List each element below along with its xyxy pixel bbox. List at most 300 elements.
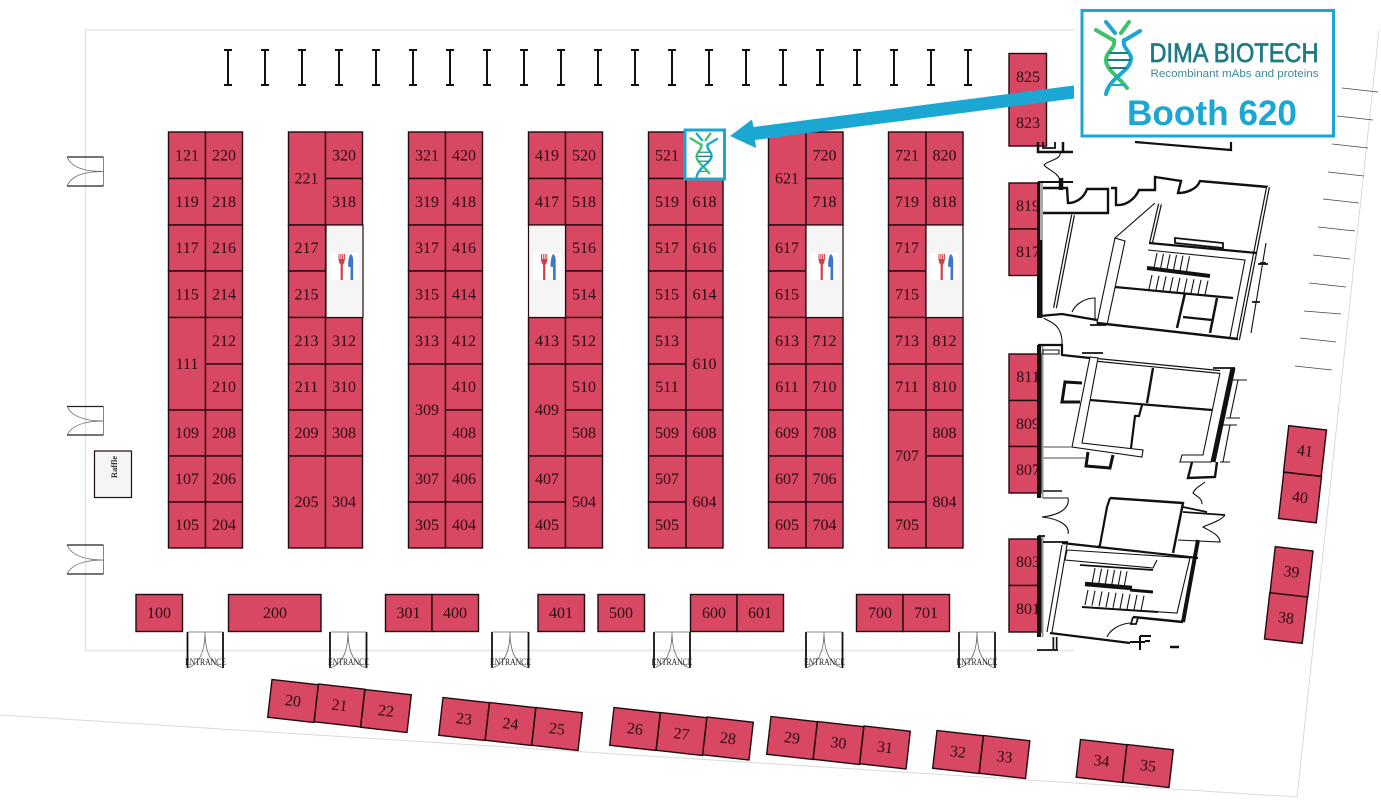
booth 24: [485, 702, 536, 746]
booth 417: 417: [535, 194, 559, 211]
entrance 3: [490, 632, 531, 668]
booth 21: 21: [331, 697, 348, 715]
booth 705: 705: [895, 517, 919, 534]
icon: small DNA logo: [691, 134, 717, 177]
booth 218: 218: [212, 194, 236, 211]
booth 809: 809: [1016, 416, 1040, 433]
booth 718: 718: [812, 194, 836, 211]
booth 706: 706: [812, 471, 836, 488]
booth 715: 715: [895, 286, 919, 304]
entrance 5: [804, 632, 845, 668]
booth 27: [656, 712, 707, 756]
booth 713: 713: [895, 333, 919, 350]
entrance 3: ENTRANCE: [490, 658, 531, 668]
booth 205: 205: [294, 494, 318, 511]
booth 608: [686, 410, 723, 456]
raffle box: Raffle: [109, 456, 119, 478]
booth 420: [446, 132, 482, 178]
booth 24: 24: [502, 715, 519, 734]
booth 610: 610: [692, 356, 716, 373]
brand name: DIMA BIOTECH: [1150, 38, 1318, 68]
entrance 4: ENTRANCE: [652, 658, 693, 668]
booth 719: [888, 178, 926, 225]
booth 600: [690, 594, 737, 632]
tagline: Recombinant mAbs and proteins: [1150, 68, 1319, 80]
booth 504: [566, 456, 602, 548]
top wall columns: [224, 50, 972, 85]
booth 304: [326, 456, 362, 548]
booth 34: [1076, 739, 1127, 783]
booth 819: [1009, 183, 1041, 229]
booth 216: [206, 225, 242, 271]
booth 418: 418: [452, 194, 476, 211]
booth 507: 507: [655, 471, 679, 488]
booth 513: 513: [655, 333, 679, 350]
booth 804: 804: [932, 494, 956, 511]
booth 514: [566, 271, 602, 318]
booth 208: [206, 410, 242, 456]
booth 215: [288, 271, 326, 318]
booth 107: [168, 456, 206, 502]
booth 410: [446, 364, 482, 410]
booth 109: [168, 410, 206, 456]
booth 404: 404: [452, 517, 476, 534]
icon: DNA logo: [1096, 22, 1140, 94]
booth 30: [813, 721, 864, 765]
booth 510: [566, 364, 602, 410]
booth 209: [288, 410, 326, 456]
booth 408: 408: [452, 425, 476, 442]
booth 801: [1009, 586, 1041, 632]
booth 312: [326, 318, 362, 364]
side door 2: [67, 406, 104, 435]
booth 22: 22: [377, 702, 395, 721]
booth column F: [768, 132, 843, 548]
booth 804: [926, 456, 963, 548]
booth 39: 39: [1283, 563, 1300, 582]
booth 509: [648, 410, 686, 456]
booth 309: [408, 364, 446, 456]
booth 601: [737, 594, 784, 632]
booth 317: [408, 225, 446, 271]
booth 701: [903, 594, 950, 632]
booth 35: [1123, 744, 1173, 788]
booth 613: [768, 318, 806, 364]
booth 720: [806, 132, 843, 178]
booth 508: [566, 410, 602, 456]
booth 416: [446, 225, 482, 271]
booth 801: 801: [1016, 601, 1040, 618]
booth 212: [206, 318, 242, 364]
booth 705: [888, 502, 926, 548]
booth column E: [648, 132, 723, 548]
booth 29: 29: [783, 729, 801, 748]
booth 26: 26: [626, 720, 644, 739]
booth 510: 510: [572, 379, 596, 396]
booth 808: 808: [932, 425, 956, 442]
booth 413: 413: [535, 333, 559, 350]
booth 216: 216: [212, 240, 236, 257]
booth 721: [888, 132, 926, 178]
booth 117: [168, 225, 206, 271]
booth 611: 611: [775, 379, 799, 396]
booth 618: [686, 178, 723, 225]
booth 310: [326, 364, 362, 410]
booth 318: 318: [332, 194, 356, 211]
booth 512: 512: [572, 333, 596, 350]
booth 204: [206, 502, 242, 548]
booth 319: 319: [415, 194, 439, 211]
booth 212: 212: [212, 333, 236, 350]
booth 307: 307: [415, 471, 439, 488]
booth 220: 220: [212, 148, 236, 164]
booth 607: [768, 456, 806, 502]
booth 509: 509: [655, 425, 679, 442]
booth 410: 410: [452, 379, 476, 396]
booth 38: [1264, 593, 1308, 643]
booth 613: 613: [775, 333, 799, 350]
booth 315: 315: [415, 286, 439, 304]
booth 803: 803: [1016, 554, 1040, 571]
entrance 1: ENTRANCE: [185, 658, 226, 668]
booth 601: 601: [748, 605, 772, 622]
booth 409: [528, 364, 566, 456]
booth 39: [1270, 547, 1313, 597]
booth 825: [1009, 54, 1046, 100]
booth 304: 304: [332, 494, 356, 511]
booth 817: [1009, 229, 1041, 276]
booth 401: 401: [549, 605, 573, 622]
booth 823: 823: [1016, 115, 1040, 132]
booth 820: [926, 132, 963, 178]
booth 515: 515: [655, 286, 679, 304]
booth 419: [528, 132, 566, 178]
booth 508: 508: [572, 425, 596, 442]
booth 618: 618: [692, 194, 716, 211]
booth 704: [806, 502, 843, 548]
booth 710: 710: [812, 379, 836, 396]
booth 621: [768, 132, 806, 225]
booth 41: [1283, 426, 1327, 476]
booth 721: 721: [895, 148, 919, 164]
booth 405: 405: [535, 517, 559, 534]
booth 611: [768, 364, 806, 410]
booth 206: 206: [212, 471, 236, 488]
booth 711: [888, 364, 926, 410]
booth 810: [926, 364, 963, 410]
booth 518: [566, 178, 602, 225]
right wall booths: [1009, 54, 1046, 632]
booth 707: [888, 410, 926, 502]
booth 521: [648, 132, 686, 178]
booth 518: 518: [572, 194, 596, 211]
booth 516: 516: [572, 240, 596, 257]
booth 208: 208: [212, 425, 236, 442]
booth column G: [888, 132, 963, 548]
booth 309: 309: [415, 402, 439, 419]
arrow to booth 620: [730, 86, 1074, 148]
booth 818: 818: [932, 194, 956, 211]
booth 318: [326, 178, 362, 225]
booth 811: [1009, 354, 1041, 400]
booth 33: 33: [996, 748, 1013, 767]
booth 712: 712: [812, 333, 836, 350]
booth 305: 305: [415, 517, 439, 534]
booth 117: 117: [175, 240, 199, 257]
booth 221: [288, 132, 326, 225]
booth 404: [446, 502, 482, 548]
booth 610: [686, 318, 723, 410]
booth 414: [446, 271, 482, 318]
booth 313: 313: [415, 333, 439, 350]
booth 615: [768, 271, 806, 318]
booth 820: 820: [932, 148, 956, 164]
booth 109: 109: [175, 425, 199, 442]
booth 215: 215: [294, 286, 318, 304]
booth 621: 621: [775, 170, 799, 188]
entrance 2: ENTRANCE: [328, 658, 369, 668]
booth 30: 30: [830, 734, 847, 753]
booth 308: 308: [332, 425, 356, 442]
booth 500: [598, 594, 644, 632]
booth 708: 708: [812, 425, 836, 442]
booth 121: 121: [175, 148, 199, 164]
booth 517: 517: [655, 240, 679, 257]
booth 809: [1009, 400, 1041, 446]
booth 315: [408, 271, 446, 318]
tilted bottom booths: [268, 679, 1173, 788]
booth 608: 608: [692, 425, 716, 442]
booth 38: 38: [1277, 609, 1295, 628]
booth 409: 409: [535, 402, 559, 419]
booth 416: 416: [452, 240, 476, 257]
booth 811: 811: [1016, 369, 1040, 386]
booth 609: [768, 410, 806, 456]
booth 414: 414: [452, 286, 476, 304]
booth 35: 35: [1139, 757, 1157, 776]
booth 210: 210: [212, 379, 236, 396]
booth 609: 609: [775, 425, 799, 442]
booth 615: 615: [775, 286, 799, 304]
booth 23: 23: [455, 710, 473, 729]
booth column C: [408, 132, 482, 548]
booth 400: 400: [443, 605, 467, 622]
booth 405: [528, 502, 566, 548]
booth 519: 519: [655, 194, 679, 211]
booth 200: 200: [263, 605, 287, 622]
booth 712: [806, 318, 843, 364]
booth 700: 700: [868, 605, 892, 622]
booth 700: [856, 594, 903, 632]
booth 22: [361, 689, 411, 733]
booth 711: 711: [895, 379, 919, 396]
booth 25: 25: [548, 720, 566, 739]
booth 807: 807: [1016, 462, 1040, 479]
booth 520: 520: [572, 148, 596, 164]
booth 614: [686, 271, 723, 318]
booth 605: 605: [775, 517, 799, 534]
booth 616: [686, 225, 723, 271]
booth 823: [1009, 100, 1046, 146]
booth 500: 500: [609, 605, 633, 622]
booth 812: [926, 318, 963, 364]
booth 713: [888, 318, 926, 364]
booth 204: 204: [212, 517, 236, 534]
booth 210: [206, 364, 242, 410]
booth 715: [888, 271, 926, 318]
booth 507: [648, 456, 686, 502]
booth 605: [768, 502, 806, 548]
booth 321: 321: [415, 148, 439, 164]
booth 213: [288, 318, 326, 364]
booth 28: 28: [719, 730, 737, 748]
booth 407: 407: [535, 471, 559, 488]
booth 319: [408, 178, 446, 225]
booth 307: [408, 456, 446, 502]
side door 1: [67, 157, 104, 186]
entrance 4: [652, 632, 693, 668]
cafe area F: [806, 225, 843, 318]
booth 516: [566, 225, 602, 271]
booth 115: 115: [175, 286, 199, 304]
building floor plan upper: [1038, 142, 1268, 340]
booth 413: [528, 318, 566, 364]
booth 320: 320: [332, 148, 356, 164]
booth 515: [648, 271, 686, 318]
booth 407: [528, 456, 566, 502]
building floor plan lower: [1037, 498, 1225, 650]
Dima Biotech booth 620 marker: [685, 130, 724, 179]
booth 100: [136, 594, 182, 632]
booth 718: [806, 178, 843, 225]
booth 20: 20: [284, 692, 302, 711]
booth 808: [926, 410, 963, 456]
booth 614: 614: [692, 286, 716, 304]
booth 519: [648, 178, 686, 225]
booth 513: [648, 318, 686, 364]
cafe area B: [326, 225, 363, 318]
booth 27: 27: [673, 725, 690, 744]
booth 308: [326, 410, 362, 456]
booth 720: 720: [812, 148, 836, 164]
booth 313: [408, 318, 446, 364]
booth 517: [648, 225, 686, 271]
booth 512: [566, 318, 602, 364]
booth 23: [439, 697, 489, 741]
cafe area G: [926, 225, 963, 318]
booth 111: [168, 318, 206, 410]
booth 818: [926, 178, 963, 225]
booth 817: 817: [1016, 244, 1040, 261]
booth 33: [979, 735, 1030, 779]
booth 105: [168, 502, 206, 548]
booth 819: 819: [1016, 198, 1040, 215]
booth 717: [888, 225, 926, 271]
booth 32: 32: [949, 743, 967, 762]
booth 115: [168, 271, 206, 318]
booth 520: [566, 132, 602, 178]
booth number: Booth 620: [1127, 94, 1297, 133]
booth 312: 312: [332, 333, 356, 350]
booth 505: 505: [655, 517, 679, 534]
booth 607: 607: [775, 471, 799, 488]
booth 412: 412: [452, 333, 476, 350]
booth 206: [206, 456, 242, 502]
booth 825: 825: [1016, 69, 1040, 86]
booth 803: [1009, 539, 1041, 586]
booth 105: 105: [175, 517, 199, 534]
booth 31: 31: [876, 739, 894, 757]
booth 412: [446, 318, 482, 364]
booth 209: 209: [294, 425, 318, 442]
side door 3: [67, 545, 104, 574]
entrance 1: [185, 632, 226, 668]
booth 704: 704: [812, 517, 836, 534]
booth 100: 100: [147, 605, 171, 622]
booth 26: [610, 707, 660, 751]
booth 417: [528, 178, 566, 225]
booth 419: 419: [535, 148, 559, 164]
booth 305: [408, 502, 446, 548]
booth 511: [648, 364, 686, 410]
booth 31: [860, 726, 910, 769]
booth 200: [228, 594, 321, 632]
booth 213: 213: [294, 333, 318, 350]
booth 301: 301: [396, 605, 420, 622]
booth 514: 514: [572, 286, 596, 304]
cafe area D: [528, 225, 566, 318]
booth 211: 211: [295, 379, 318, 396]
booth 20: [268, 679, 318, 723]
booth 617: [768, 225, 806, 271]
booth column B: [288, 132, 362, 548]
booth 710: [806, 364, 843, 410]
booth 205: [288, 456, 326, 548]
booth 521: 521: [655, 148, 679, 164]
booth 812: 812: [932, 333, 956, 350]
tilted right booths: [1264, 426, 1327, 643]
booth 707: 707: [895, 448, 919, 465]
booth 310: 310: [332, 379, 356, 396]
booth 25: [532, 707, 582, 751]
booth 119: 119: [175, 194, 199, 211]
booth 220: [206, 132, 242, 178]
booth 511: 511: [655, 379, 679, 396]
booth 617: 617: [775, 240, 799, 257]
right perimeter ticks: [1295, 88, 1378, 370]
hall outline: [86, 30, 1074, 650]
booth 21: [314, 684, 365, 727]
booth 406: 406: [452, 471, 476, 488]
booth 221: 221: [294, 170, 318, 188]
booth 121: [168, 132, 206, 178]
entrance 6: ENTRANCE: [956, 658, 998, 668]
booth 408: [446, 410, 482, 456]
booth 701: 701: [914, 605, 938, 622]
booth 604: [686, 456, 723, 548]
booth 807: [1009, 446, 1041, 493]
raffle box: [94, 451, 132, 498]
booth 616: 616: [692, 240, 716, 257]
booth 719: 719: [895, 194, 919, 211]
booth 317: 317: [415, 240, 439, 257]
callout: Dima Biotech Booth 620: [1082, 10, 1334, 136]
booth 600: 600: [702, 605, 726, 622]
booth 320: [326, 132, 362, 178]
booth 717: 717: [895, 240, 919, 257]
booth 401: [538, 594, 584, 632]
booth column A: [168, 132, 242, 548]
